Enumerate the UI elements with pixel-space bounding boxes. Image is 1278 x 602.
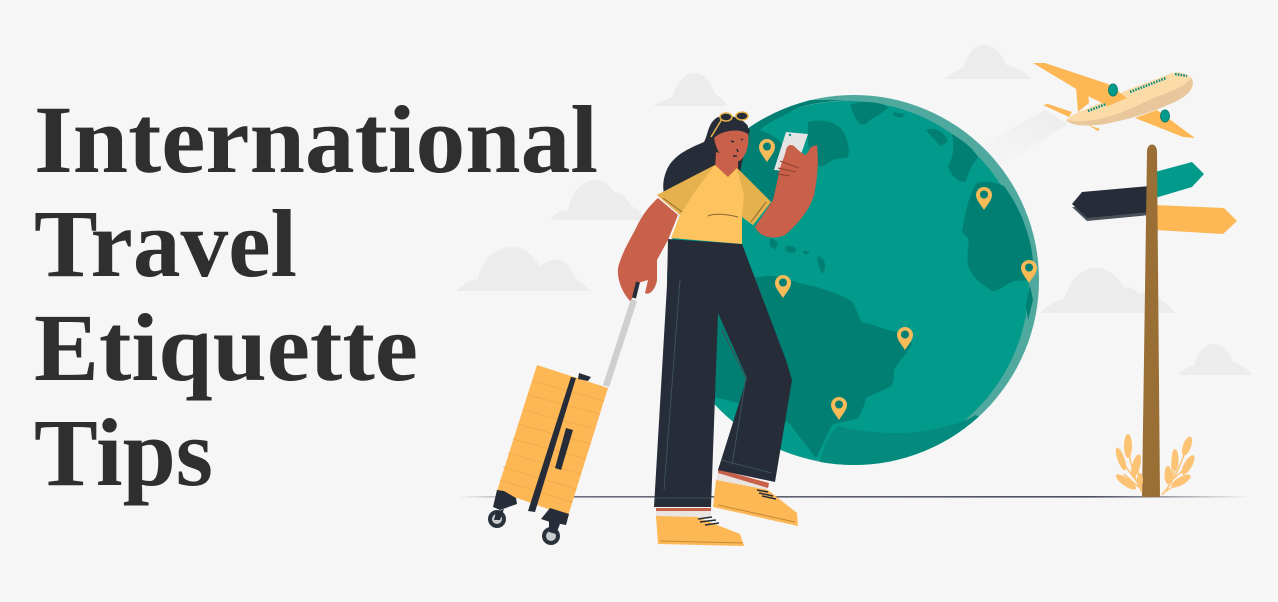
sunglasses — [711, 112, 748, 137]
title — [34, 86, 598, 506]
trousers — [654, 239, 792, 507]
engines — [1108, 84, 1170, 122]
trouser seams — [655, 280, 772, 498]
airplane — [1033, 63, 1195, 138]
title: Travel — [34, 190, 297, 297]
sock cuffs — [656, 469, 769, 511]
title: Etiquette — [34, 294, 418, 401]
southern polar band — [820, 415, 979, 465]
teal sign — [1155, 162, 1204, 198]
front shoe — [656, 511, 744, 546]
suitcase — [488, 365, 608, 545]
right arm and hand — [755, 145, 818, 238]
hair fringe — [713, 116, 748, 139]
suitcase handle — [606, 300, 634, 386]
plant — [1114, 434, 1197, 495]
lower wing — [1135, 110, 1195, 138]
back shoe — [713, 470, 798, 526]
windows — [1088, 74, 1187, 111]
facial features — [731, 139, 743, 156]
suitcase corners — [493, 490, 569, 525]
face — [714, 131, 748, 162]
phone — [774, 132, 808, 172]
pole — [1142, 144, 1160, 497]
south america — [700, 276, 912, 458]
caribbean islands — [770, 238, 825, 274]
hair behind shoulders — [663, 117, 750, 198]
plane contrail — [975, 110, 1068, 166]
signpost — [1072, 144, 1237, 497]
suitcase grip — [634, 282, 638, 298]
suitcase ridges — [500, 381, 604, 502]
title: International — [34, 86, 598, 193]
suitcase top latch — [578, 373, 591, 381]
dark sign — [1072, 186, 1150, 221]
neck — [715, 152, 738, 178]
globe rim — [669, 95, 1039, 465]
north america — [740, 100, 846, 205]
left arm — [618, 198, 678, 301]
location pins — [759, 139, 1037, 420]
shirt — [657, 165, 771, 244]
suitcase side handle — [555, 428, 573, 470]
globe — [667, 95, 1039, 480]
upper wing — [1033, 63, 1127, 106]
yellow sign — [1155, 205, 1237, 234]
woman with suitcase — [488, 112, 818, 546]
suitcase body — [497, 365, 608, 516]
africa — [962, 182, 1033, 291]
suitcase zip stripe — [528, 377, 576, 512]
fuselage — [1066, 72, 1193, 125]
greenland and europe — [926, 129, 948, 146]
ground line — [458, 496, 1250, 498]
globe ocean — [667, 101, 1029, 463]
tail fin — [1076, 87, 1089, 112]
background clouds — [456, 45, 1252, 375]
fingers — [777, 161, 799, 176]
horizontal stabilizer — [1043, 104, 1100, 131]
suitcase wheels — [488, 509, 560, 545]
title: Tips — [34, 399, 213, 506]
fuselage underside — [1066, 78, 1193, 125]
continents — [700, 100, 1033, 458]
